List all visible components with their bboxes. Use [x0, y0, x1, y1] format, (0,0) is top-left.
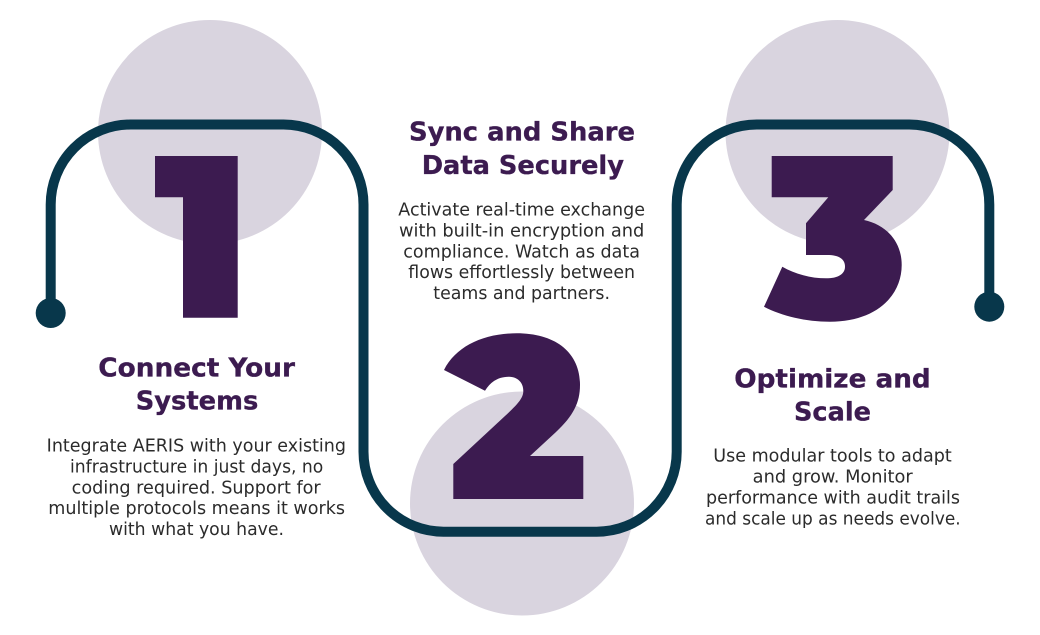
heading: step 2: Data Securely: [422, 151, 624, 181]
heading: step 1: Connect Your: [98, 354, 295, 384]
numeral 2: [444, 333, 583, 499]
body text: step 1: infrastructure in just days, no: [70, 458, 323, 478]
heading: step 2: [409, 118, 635, 181]
body text: step 2: flows effortlessly between: [408, 263, 635, 283]
body text: step 3: [705, 447, 961, 529]
body text: step 1: Integrate AERIS with your existing: [47, 437, 346, 457]
body text: step 2: with built-in encryption and: [399, 222, 644, 242]
body text: step 3: and grow. Monitor: [753, 467, 914, 487]
body text: step 2: teams and partners.: [433, 284, 610, 304]
heading: step 3: [734, 364, 931, 428]
circle: step 1: [98, 20, 322, 244]
numeral 1: [155, 156, 238, 318]
numeral 3: [764, 156, 902, 322]
body text: step 3: performance with audit trails: [706, 488, 960, 508]
body text: step 3: and scale up as needs evolve.: [705, 509, 961, 529]
connector line with end dots: [36, 124, 1004, 532]
heading: step 1: Systems: [136, 386, 258, 416]
circle: step 3: [726, 20, 950, 244]
body text: step 1: coding required. Support for: [72, 478, 322, 498]
heading: step 3: Scale: [794, 398, 871, 428]
body text: step 2: [398, 201, 645, 304]
circle: step 2: [410, 392, 634, 616]
heading: step 2: Sync and Share: [409, 118, 635, 148]
heading: step 1: [98, 354, 295, 416]
body text: step 3: Use modular tools to adapt: [713, 447, 952, 467]
body text: step 2: Activate real-time exchange: [398, 201, 645, 221]
body text: step 2: compliance. Watch as data: [403, 242, 640, 262]
heading: step 3: Optimize and: [734, 364, 931, 394]
body text: step 1: multiple protocols means it works: [48, 499, 345, 519]
body text: step 1: [47, 437, 346, 540]
body text: step 1: with what you have.: [109, 520, 284, 540]
